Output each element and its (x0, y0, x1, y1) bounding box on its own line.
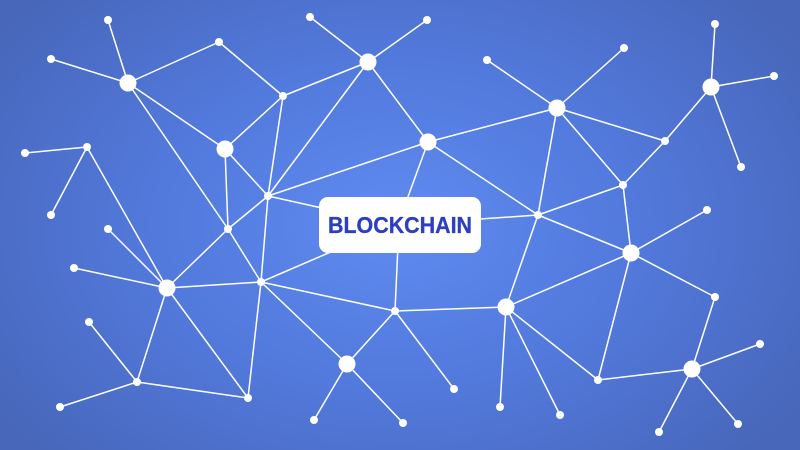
central blockchain label: BLOCKCHAIN (328, 212, 472, 238)
central blockchain label (319, 197, 481, 253)
